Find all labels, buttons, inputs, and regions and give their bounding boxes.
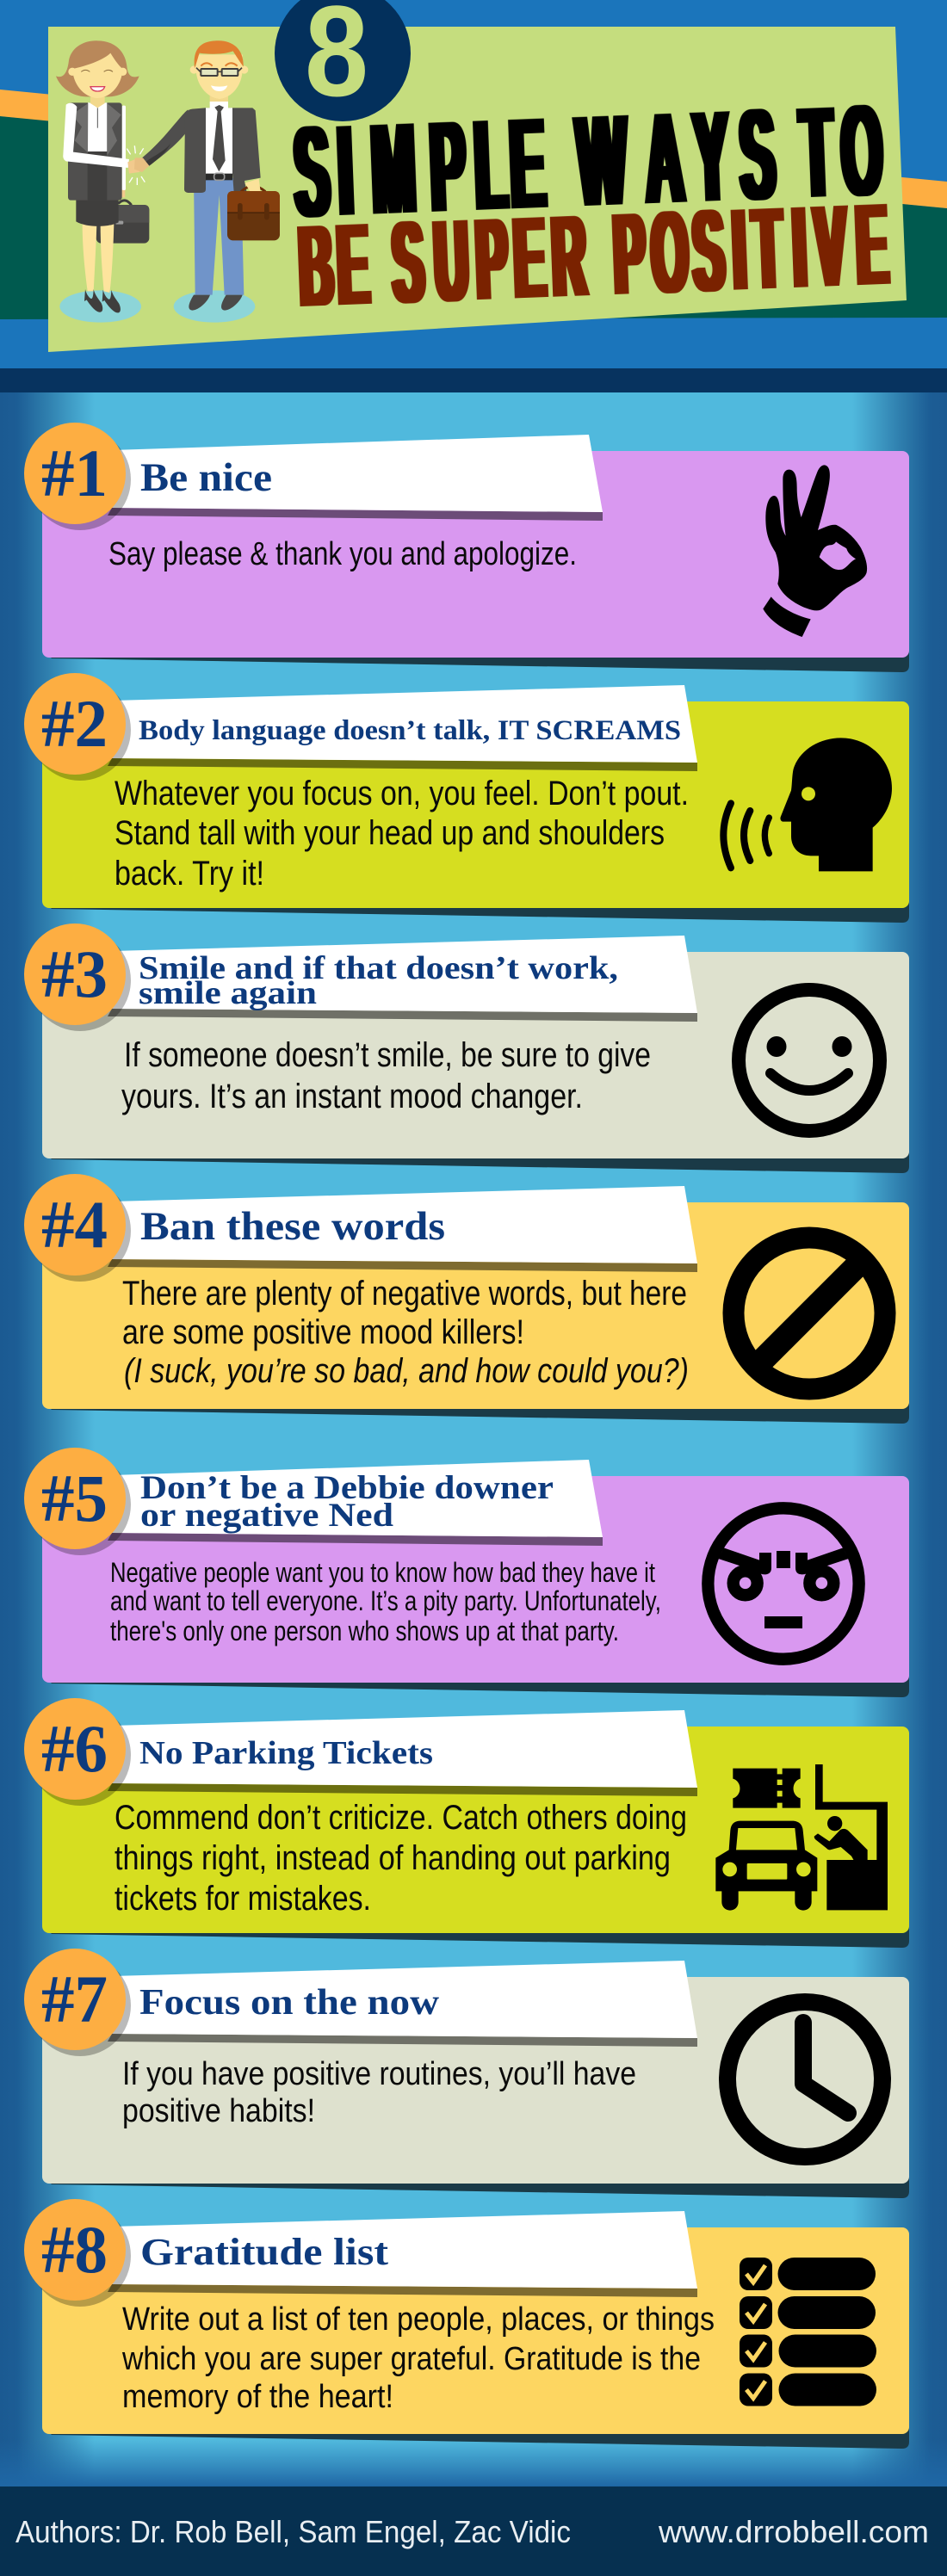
body text [122, 2056, 636, 2129]
heading: Smile and if that doesn’t work, [139, 950, 618, 986]
body text: Commend don’t criticize. Catch others doing [115, 1799, 687, 1837]
card [24, 2199, 909, 2449]
website: www.drrobbell.com [658, 2514, 929, 2549]
number: #3 [41, 936, 108, 1011]
body text: memory of the heart! [122, 2379, 393, 2415]
card [24, 673, 909, 923]
icon: OK hand [763, 465, 867, 637]
badge: big number 8 [275, 0, 411, 123]
body text: yours. It’s an instant mood changer. [121, 1078, 583, 1115]
body text: There are plenty of negative words, but here [122, 1275, 687, 1313]
panel: tip 3 [24, 924, 909, 1173]
footer [0, 2486, 947, 2576]
panel: tip 8 [24, 2199, 909, 2449]
number: #8 [41, 2212, 108, 2287]
card [24, 423, 909, 672]
body text: (I suck, you’re so bad, and how could you?) [124, 1352, 689, 1390]
man figure [142, 40, 280, 323]
authors: Authors: Dr. Rob Bell, Sam Engel, Zac Vidic [15, 2514, 571, 2549]
heading: Don’t be a Debbie downer [140, 1469, 554, 1506]
icon: smiley face [739, 990, 880, 1131]
heading: smile again [139, 975, 317, 1011]
card [24, 1174, 909, 1424]
heading: or negative Ned [140, 1497, 393, 1534]
icon: prohibition sign [733, 1238, 885, 1389]
card [24, 1698, 909, 1948]
number: #6 [41, 1711, 108, 1786]
heading [139, 950, 618, 1011]
heading: Focus on the now [139, 1983, 440, 2023]
body text: Write out a list of ten people, places, or things [122, 2301, 715, 2338]
body text [121, 2301, 715, 2415]
body text: which you are super grateful. Gratitude is the [121, 2341, 701, 2377]
heading: Be nice [140, 455, 272, 500]
number: #4 [41, 1187, 108, 1262]
number: #2 [41, 686, 108, 761]
heading: Body language doesn’t talk, IT SCREAMS [139, 715, 681, 746]
panel: tip 6 [24, 1698, 909, 1948]
body text: back. Try it! [115, 855, 264, 893]
card [24, 1949, 909, 2198]
body text [122, 1275, 689, 1390]
panel: tip 2 [24, 673, 909, 923]
body text: If someone doesn’t smile, be sure to give [124, 1036, 651, 1074]
body text: Whatever you focus on, you feel. Don’t pout. [115, 775, 689, 812]
panel: tip 4 [24, 1174, 909, 1424]
body text: there's only one person who shows up at that party. [110, 1615, 619, 1646]
body text: tickets for mistakes. [115, 1880, 371, 1918]
title line 1: SIMPLE WAYS TO [292, 78, 885, 245]
panel: tip 1 [24, 423, 909, 672]
body text: Negative people want you to know how bad they have it [110, 1557, 655, 1588]
body text: Say please & thank you and apologize. [108, 536, 577, 572]
number: #1 [41, 436, 108, 510]
title line 2: BE SUPER POSITIVE [297, 179, 890, 331]
heading: No Parking Tickets [139, 1735, 433, 1771]
icon: angry face [708, 1508, 859, 1659]
header panel [48, 27, 907, 352]
body text: and want to tell everyone. It’s a pity party. Unfortunately, [110, 1585, 661, 1616]
body text: If you have positive routines, you’ll have [122, 2056, 636, 2092]
body text: positive habits! [122, 2093, 315, 2129]
body text: are some positive mood killers! [122, 1313, 524, 1351]
heading [140, 1469, 554, 1534]
number: #7 [41, 1961, 108, 2036]
panel: tip 7 [24, 1949, 909, 2198]
number: #5 [41, 1461, 108, 1535]
icon: checklist [740, 2258, 876, 2406]
body text: things right, instead of handing out parking [115, 1839, 671, 1877]
card [24, 924, 909, 1173]
heading: Gratitude list [140, 2231, 388, 2273]
icon: parking ticket booth [715, 1764, 888, 1911]
heading: Ban these words [140, 1204, 445, 1249]
body text [115, 775, 689, 893]
body text [110, 1557, 661, 1646]
header background [0, 0, 947, 392]
icon: speaking head [723, 738, 892, 871]
handshake [127, 145, 149, 185]
panel: tip 5 [24, 1448, 909, 1697]
body text: Stand tall with your head up and shoulders [115, 814, 665, 852]
icon: clock [727, 2002, 882, 2157]
illustration: two business people shaking hands [56, 40, 280, 323]
body text [121, 1036, 651, 1115]
body text [115, 1799, 687, 1918]
card [24, 1448, 909, 1697]
woman figure [56, 40, 149, 323]
